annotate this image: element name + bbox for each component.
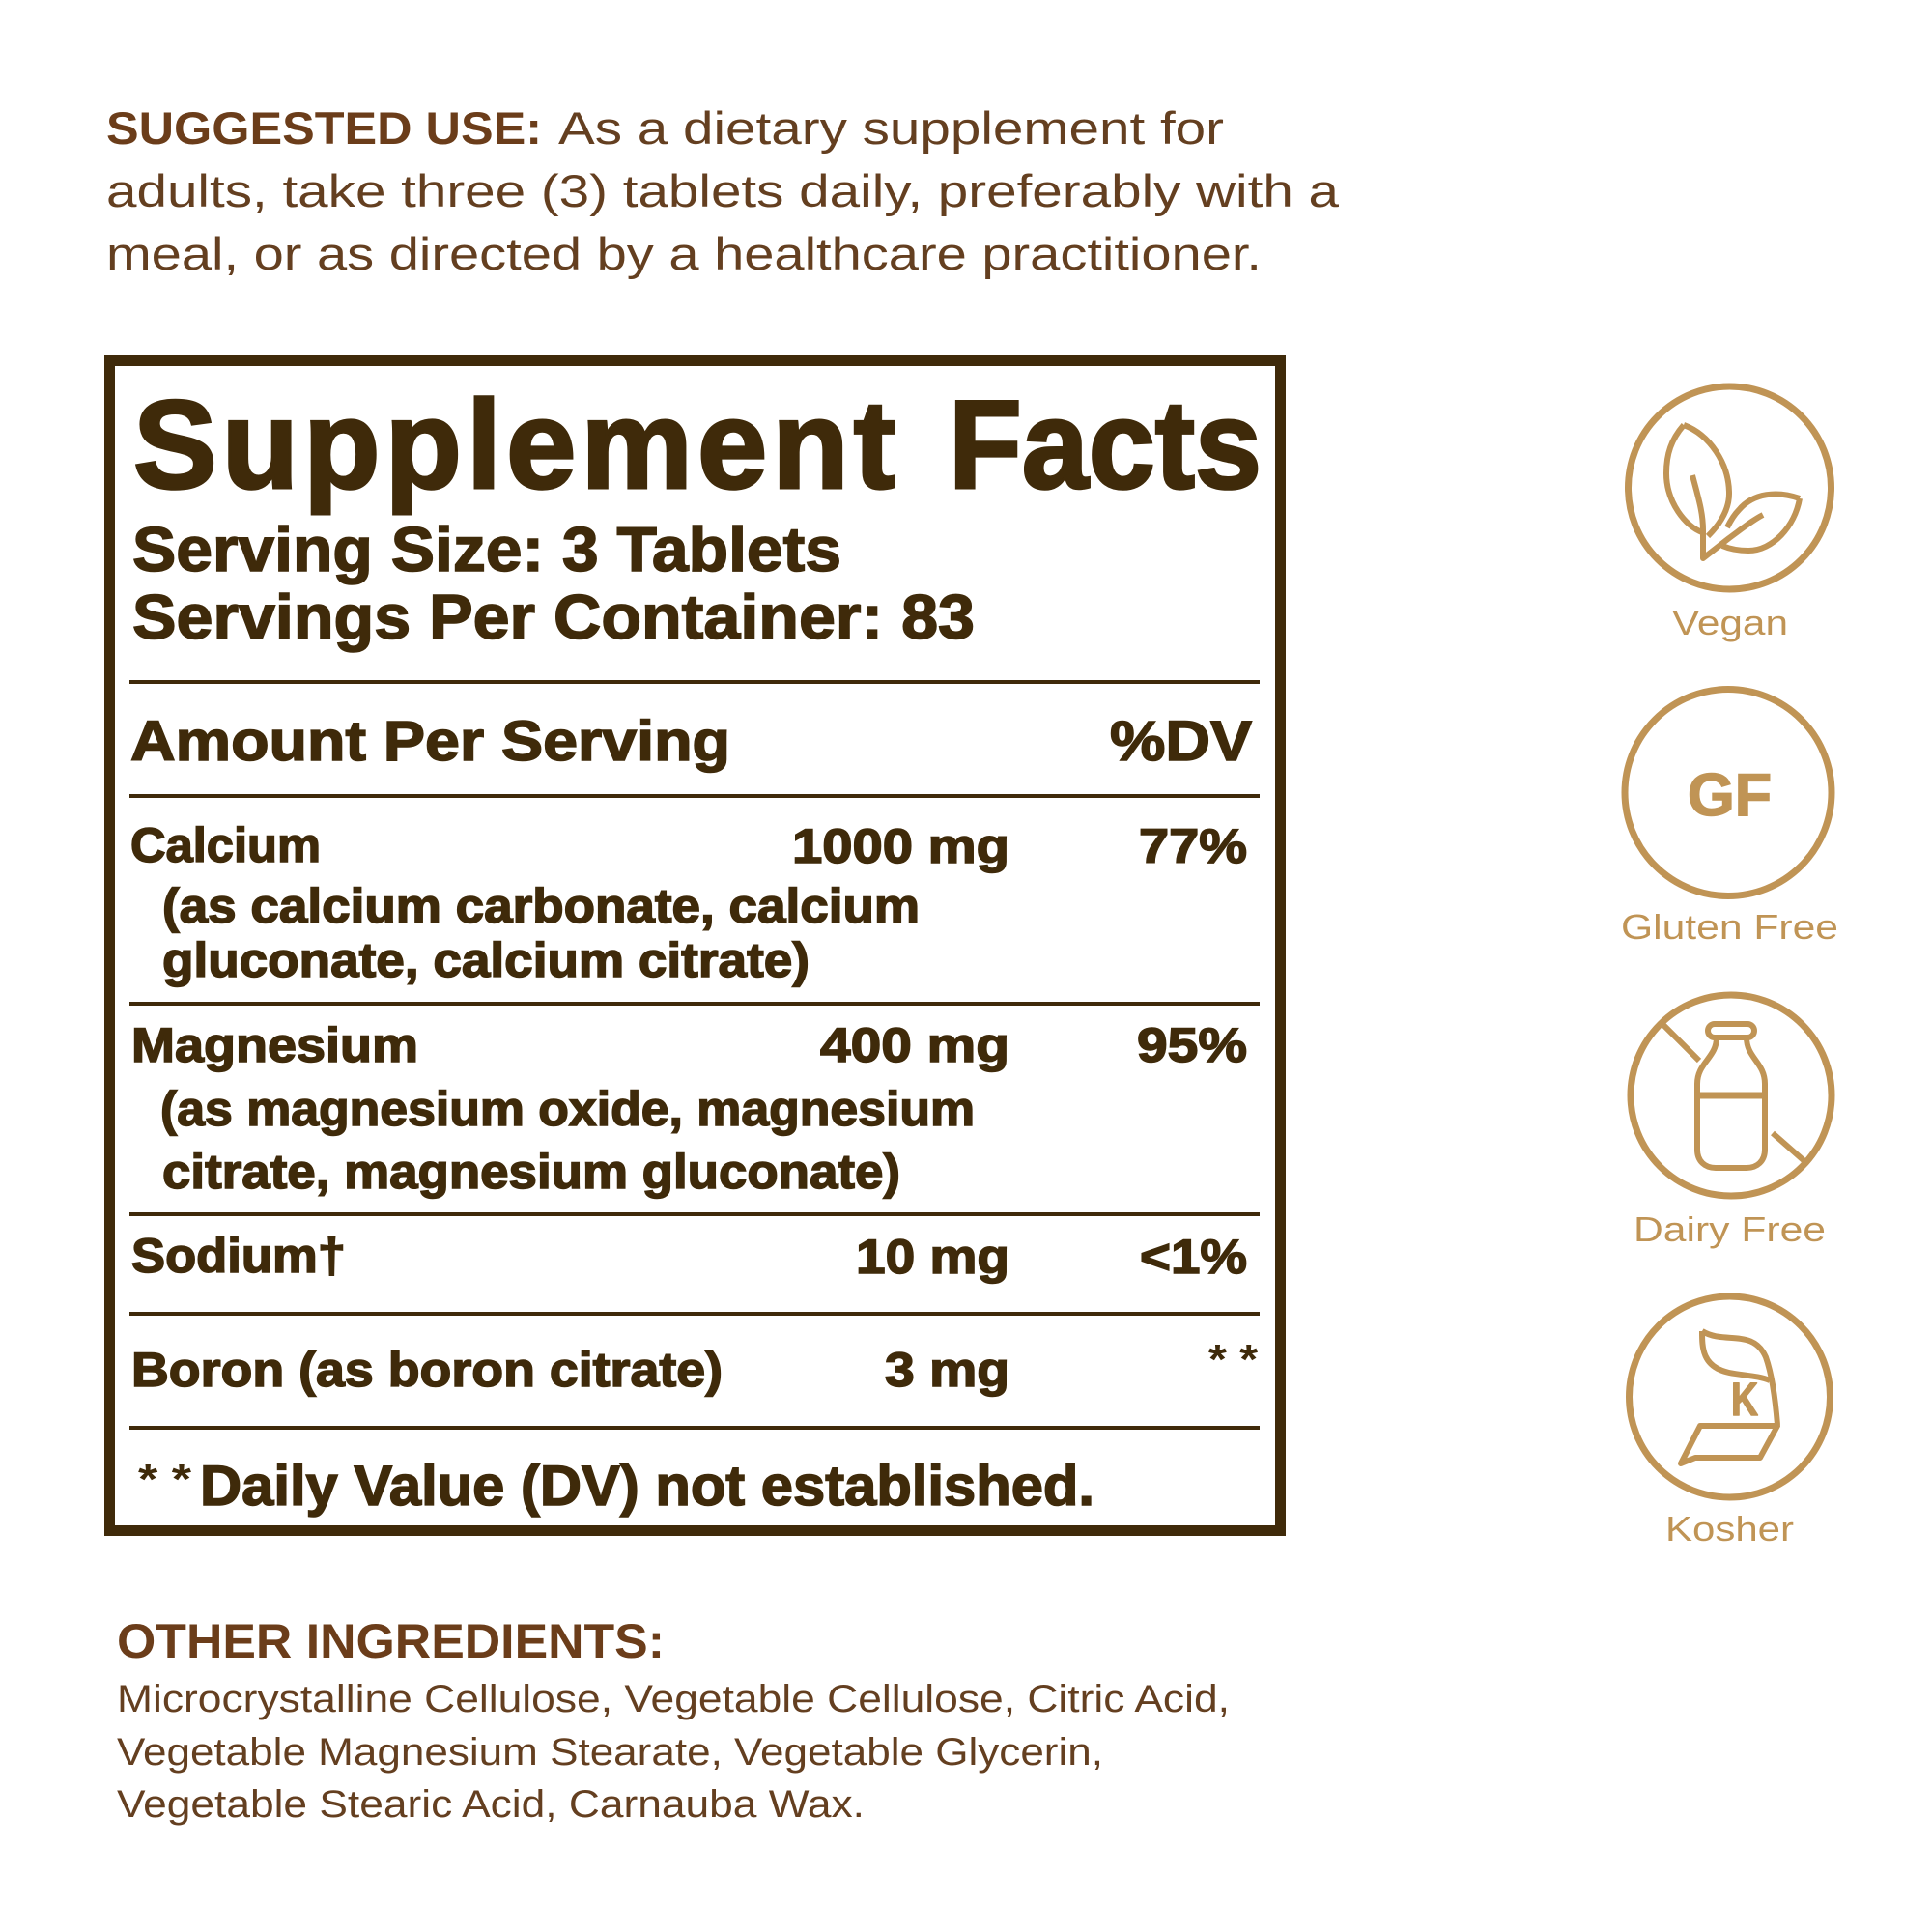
label: dairy free: Dairy Free (1634, 1209, 1826, 1249)
title (133, 374, 1262, 515)
row: calcium: (as calcium carbonate, calcium (162, 879, 920, 933)
serving information: Servings Per Container: 83 (132, 582, 975, 652)
row: magnesium: 95% (1137, 1018, 1247, 1072)
row: magnesium: 400 mg (820, 1018, 1009, 1072)
footnote: Daily Value (DV) not established. (200, 1455, 1094, 1518)
text block: other ingredients: OTHER INGREDIENTS: (117, 1614, 665, 1668)
row: magnesium (131, 1018, 1247, 1199)
row: boron: 3 mg (885, 1343, 1009, 1397)
label: kosher: Kosher (1665, 1509, 1794, 1548)
row: sodium: 10 mg (856, 1230, 1009, 1284)
text block: suggested use: SUGGESTED USE: (106, 102, 542, 154)
panel: supplement facts (110, 361, 1281, 1530)
text block: other ingredients (117, 1614, 1230, 1826)
column header row: Amount Per Serving (130, 710, 730, 773)
text block: other ingredients: Microcrystalline Cellulose, Vegetable Cellulose, Citric Acid, (117, 1678, 1230, 1720)
label: gluten free: Gluten Free (1621, 907, 1838, 947)
title: Facts (949, 374, 1262, 515)
icon: dairy free bottle (1631, 995, 1832, 1196)
row: sodium (131, 1229, 1247, 1284)
row: calcium (130, 818, 1247, 987)
title: Supplement (133, 374, 895, 515)
icon: kosher symbol: K (1731, 1375, 1758, 1426)
label: vegan: Vegan (1672, 603, 1788, 642)
text block: other ingredients: Vegetable Stearic Acid, Carnauba Wax. (117, 1783, 865, 1826)
serving information (132, 514, 975, 652)
text block: suggested use: meal, or as directed by a healthcare practitioner. (106, 228, 1262, 279)
row: sodium: Sodium† (131, 1229, 346, 1283)
column header row (130, 710, 1252, 773)
icon: kosher symbol (1629, 1296, 1830, 1497)
serving information: Serving Size: 3 Tablets (132, 514, 841, 584)
icon: gluten free: GF (1688, 762, 1772, 829)
icon: gluten free (1625, 690, 1832, 896)
row: calcium: gluconate, calcium citrate) (162, 933, 810, 987)
row: boron: Boron (as boron citrate) (131, 1343, 723, 1397)
text block: suggested use: As a dietary supplement for (558, 102, 1224, 154)
row: calcium: Calcium (130, 818, 321, 872)
text block: suggested use: adults, take three (3) tablets daily, preferably with a (106, 165, 1340, 216)
text block: other ingredients: Vegetable Magnesium Stearate, Vegetable Glycerin, (117, 1731, 1103, 1774)
column header row: %DV (1110, 710, 1252, 773)
row: sodium: <1% (1140, 1230, 1247, 1284)
row: magnesium: (as magnesium oxide, magnesium (160, 1082, 975, 1136)
row: magnesium: Magnesium (131, 1018, 418, 1072)
row: boron (131, 1336, 1259, 1397)
footnote: * * (138, 1456, 192, 1503)
row: boron: * * (1208, 1336, 1259, 1383)
row: calcium: 1000 mg (792, 819, 1009, 873)
icon: vegan leaves (1629, 386, 1832, 589)
text block: suggested use (106, 102, 1340, 279)
row: calcium: 77% (1139, 819, 1247, 873)
row: magnesium: citrate, magnesium gluconate) (162, 1145, 900, 1199)
